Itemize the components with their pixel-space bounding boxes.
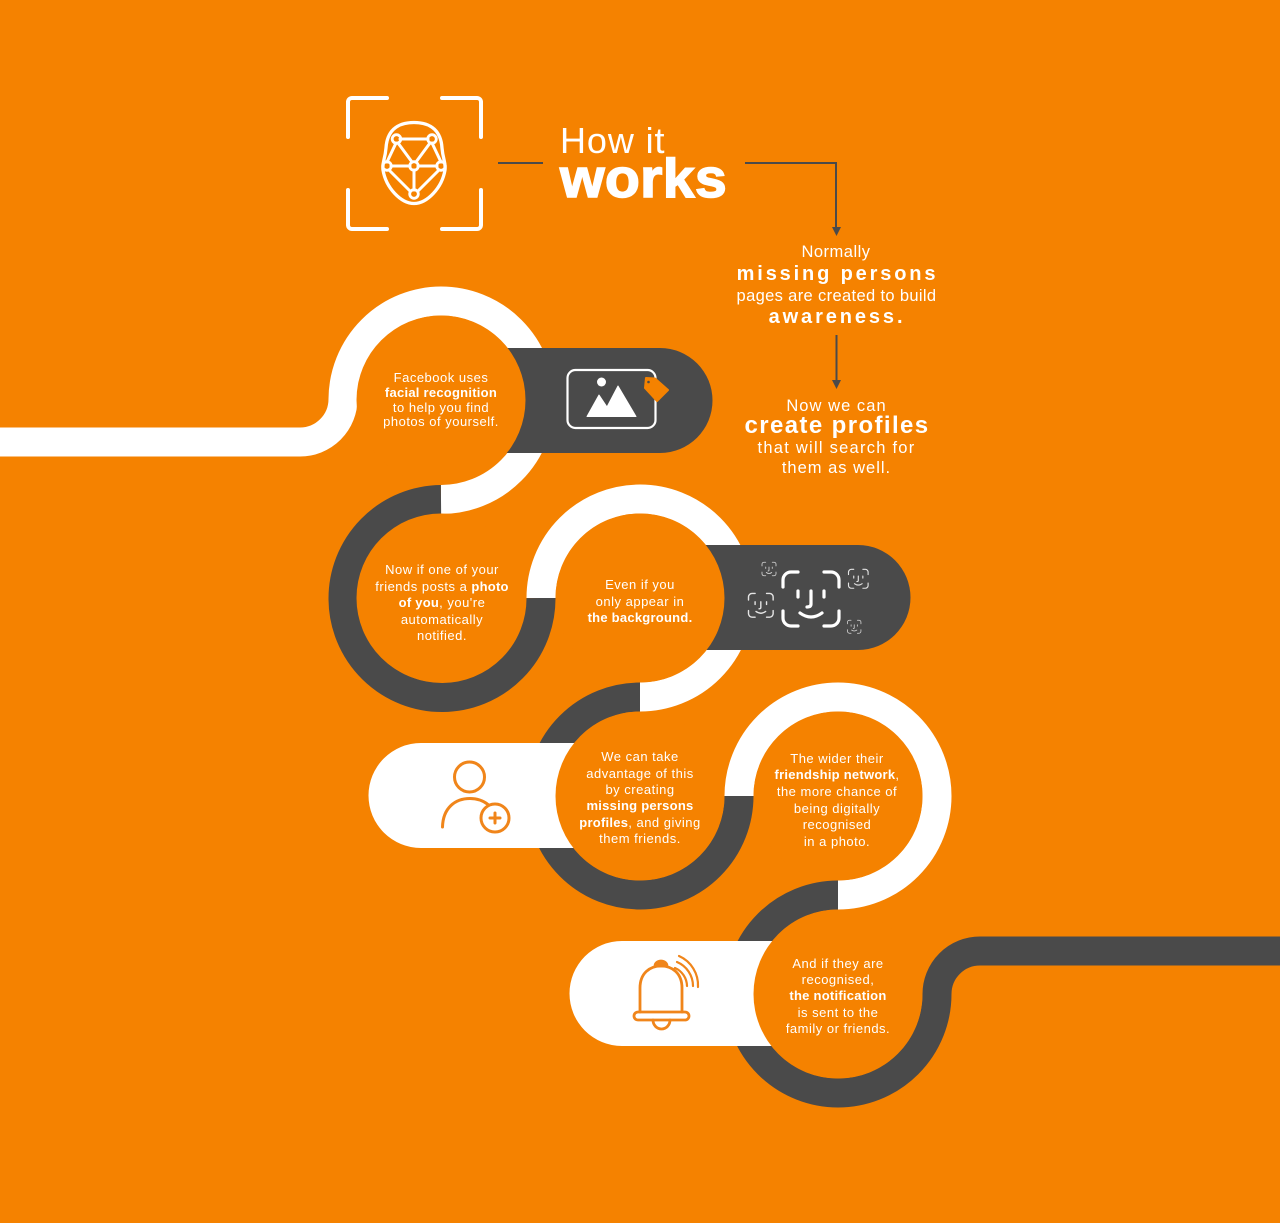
text: step 5 friendship network: in a photo.	[804, 834, 870, 849]
text: step 6 notification: is sent to the	[798, 1005, 878, 1020]
text: step 2 friends: of you, you're	[399, 595, 485, 610]
text: step 4 missing persons profiles: We can take	[601, 749, 679, 764]
text: step 6 notification: the notification	[789, 988, 887, 1003]
inner circles	[356, 316, 922, 1078]
text: create profiles: create profiles	[744, 412, 930, 439]
icon: tagged photo	[568, 370, 668, 428]
text: step 3 background	[588, 577, 692, 625]
title	[559, 120, 727, 209]
text: create profiles	[744, 397, 930, 477]
arrow: to create profiles text	[832, 335, 841, 389]
text: step 1 facebook: Facebook uses	[394, 370, 488, 385]
winding path: white and dark ring segments	[0, 301, 1280, 1093]
arrow: title to missing persons text	[745, 163, 841, 236]
text: normally missing persons: pages are created to build	[737, 287, 936, 305]
connector: icon to title	[498, 162, 543, 164]
text: step 2 friends: notified.	[417, 628, 467, 643]
text: step 6 notification: And if they are	[792, 956, 884, 971]
icon: notification bell	[634, 956, 698, 1029]
text: step 6 notification	[786, 956, 890, 1036]
title: How it	[560, 120, 665, 161]
pill: face scan panel	[640, 545, 910, 650]
text: step 4 missing persons profiles: them friends.	[599, 831, 681, 846]
text: step 5 friendship network: the more chance of	[777, 784, 897, 799]
pill: notification panel	[570, 941, 838, 1046]
text: normally missing persons: Normally	[801, 243, 871, 261]
text: normally missing persons: missing persons	[737, 263, 938, 285]
text: step 2 friends: automatically	[401, 612, 483, 627]
text: step 5 friendship network	[775, 751, 899, 849]
pill: add friend panel	[368, 743, 640, 848]
text: step 1 facebook: facial recognition	[385, 385, 497, 400]
text: step 5 friendship network: being digitally	[794, 801, 880, 816]
text: step 5 friendship network: recognised	[803, 817, 871, 832]
icon: add person	[442, 762, 509, 832]
text: step 1 facebook: photos of yourself.	[383, 414, 499, 429]
text: step 3 background: Even if you	[605, 577, 675, 592]
text: step 2 friends: friends posts a photo	[375, 579, 509, 594]
text: step 6 notification: family or friends.	[786, 1021, 890, 1036]
icon: face recognition scan	[348, 98, 481, 229]
text: step 4 missing persons profiles: by creating	[605, 782, 675, 797]
text: step 1 facebook: to help you find	[393, 400, 489, 415]
text: step 3 background: the background.	[588, 610, 692, 625]
text: step 1 facebook	[383, 370, 499, 429]
text: step 5 friendship network: The wider their	[790, 751, 884, 766]
text: step 3 background: only appear in	[596, 594, 684, 609]
text: step 4 missing persons profiles	[579, 749, 701, 846]
text: step 6 notification: recognised,	[802, 972, 874, 987]
text: create profiles: that will search for	[758, 439, 915, 457]
text: create profiles: them as well.	[782, 459, 891, 477]
text: normally missing persons	[737, 243, 938, 328]
icon: face scans	[748, 562, 868, 633]
pill: photo panel	[441, 348, 713, 453]
text: step 4 missing persons profiles: profiles, and giving	[579, 815, 701, 830]
text: normally missing persons: awareness.	[769, 306, 905, 328]
text: step 4 missing persons profiles: missing persons	[586, 798, 694, 813]
text: create profiles: Now we can	[786, 397, 887, 415]
text: step 2 friends: Now if one of your	[385, 562, 499, 577]
text: step 5 friendship network: friendship network,	[775, 767, 899, 782]
text: step 4 missing persons profiles: advantage of this	[586, 766, 694, 781]
text: step 2 friends	[375, 562, 509, 643]
title: works	[559, 147, 727, 209]
